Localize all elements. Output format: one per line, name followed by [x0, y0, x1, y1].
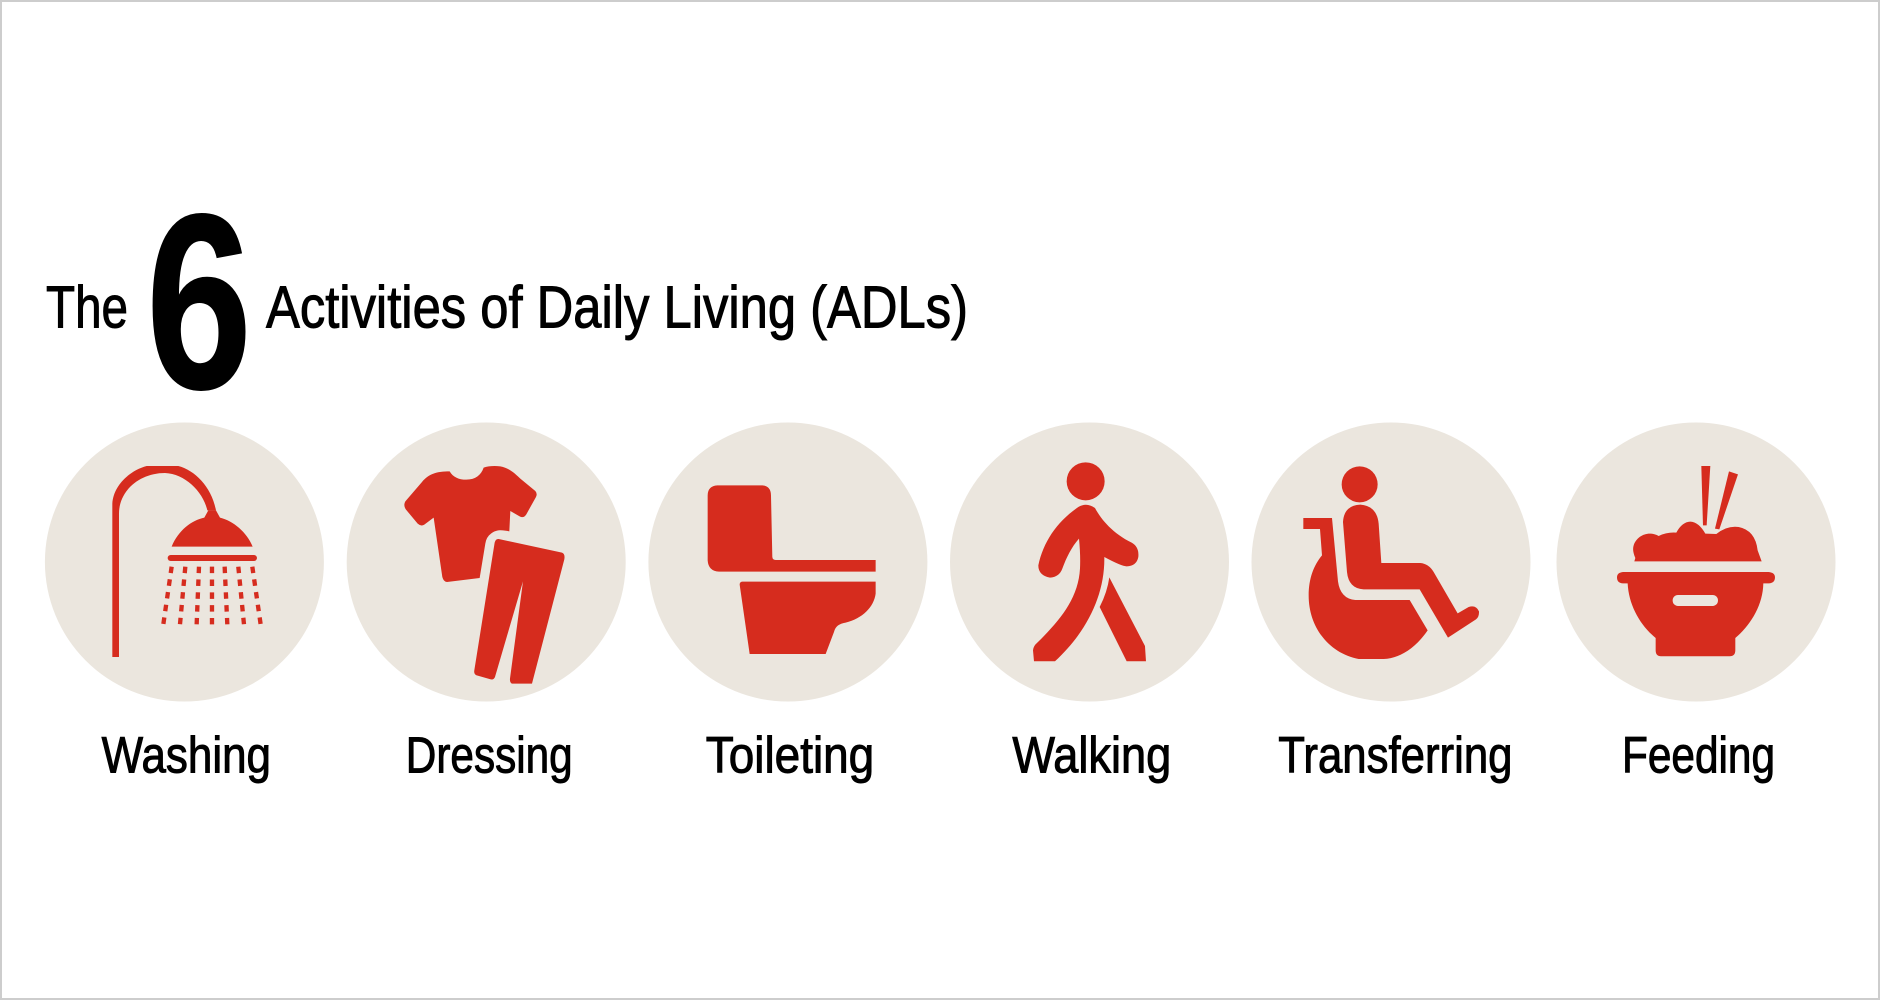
title: 6	[146, 162, 252, 441]
panel: toileting	[648, 422, 927, 784]
icon: shower	[112, 466, 261, 657]
label: Feeding: Feeding	[1622, 727, 1775, 784]
label: Transferring: Transferring	[1278, 727, 1512, 784]
panel: feeding	[1556, 422, 1836, 784]
icon: walking person	[1033, 462, 1146, 661]
panel: washing	[45, 422, 324, 784]
label: Toileting: Toileting	[706, 727, 874, 784]
panel: transferring	[1252, 422, 1530, 784]
title: Activities of Daily Living (ADLs)	[266, 275, 968, 341]
icon: toilet	[708, 485, 876, 654]
label: Walking: Walking	[1012, 727, 1171, 784]
panel: dressing	[347, 422, 626, 784]
icon: shirt and trousers	[404, 466, 565, 684]
label: Washing: Washing	[102, 727, 271, 784]
icon: wheelchair user	[1303, 466, 1479, 659]
panel: walking	[950, 422, 1229, 784]
title	[46, 162, 968, 441]
label: Dressing: Dressing	[406, 727, 573, 784]
title: The	[46, 275, 128, 341]
icon: food bowl with chopsticks	[1617, 466, 1775, 656]
